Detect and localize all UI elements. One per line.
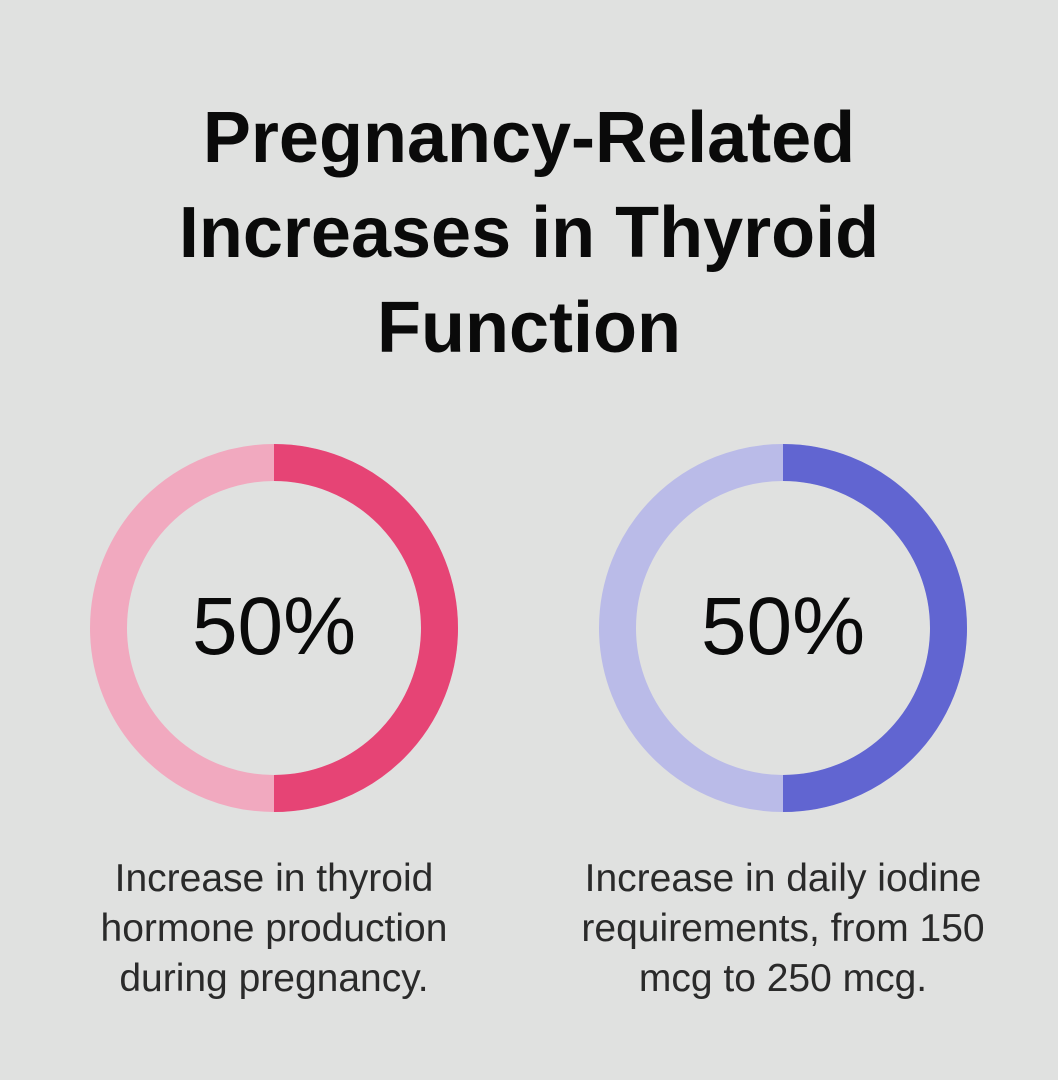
donut: blue: 50%	[701, 581, 865, 672]
title: Increases in Thyroid	[179, 193, 879, 273]
caption: left: hormone production	[101, 907, 447, 950]
caption: right: mcg to 250 mcg.	[639, 957, 927, 1000]
caption: left: Increase in thyroid	[115, 857, 433, 900]
title: Pregnancy-Related	[203, 98, 855, 178]
caption: left: during pregnancy.	[119, 957, 429, 1000]
title	[179, 98, 879, 368]
title: Function	[377, 288, 681, 368]
donut: blue	[618, 462, 948, 794]
caption: right: requirements, from 150	[581, 907, 985, 950]
caption: right	[581, 857, 985, 1000]
donut: pink	[108, 462, 440, 794]
caption: right: Increase in daily iodine	[585, 857, 981, 900]
donut: pink: 50%	[192, 581, 356, 672]
caption: left	[101, 857, 447, 1000]
